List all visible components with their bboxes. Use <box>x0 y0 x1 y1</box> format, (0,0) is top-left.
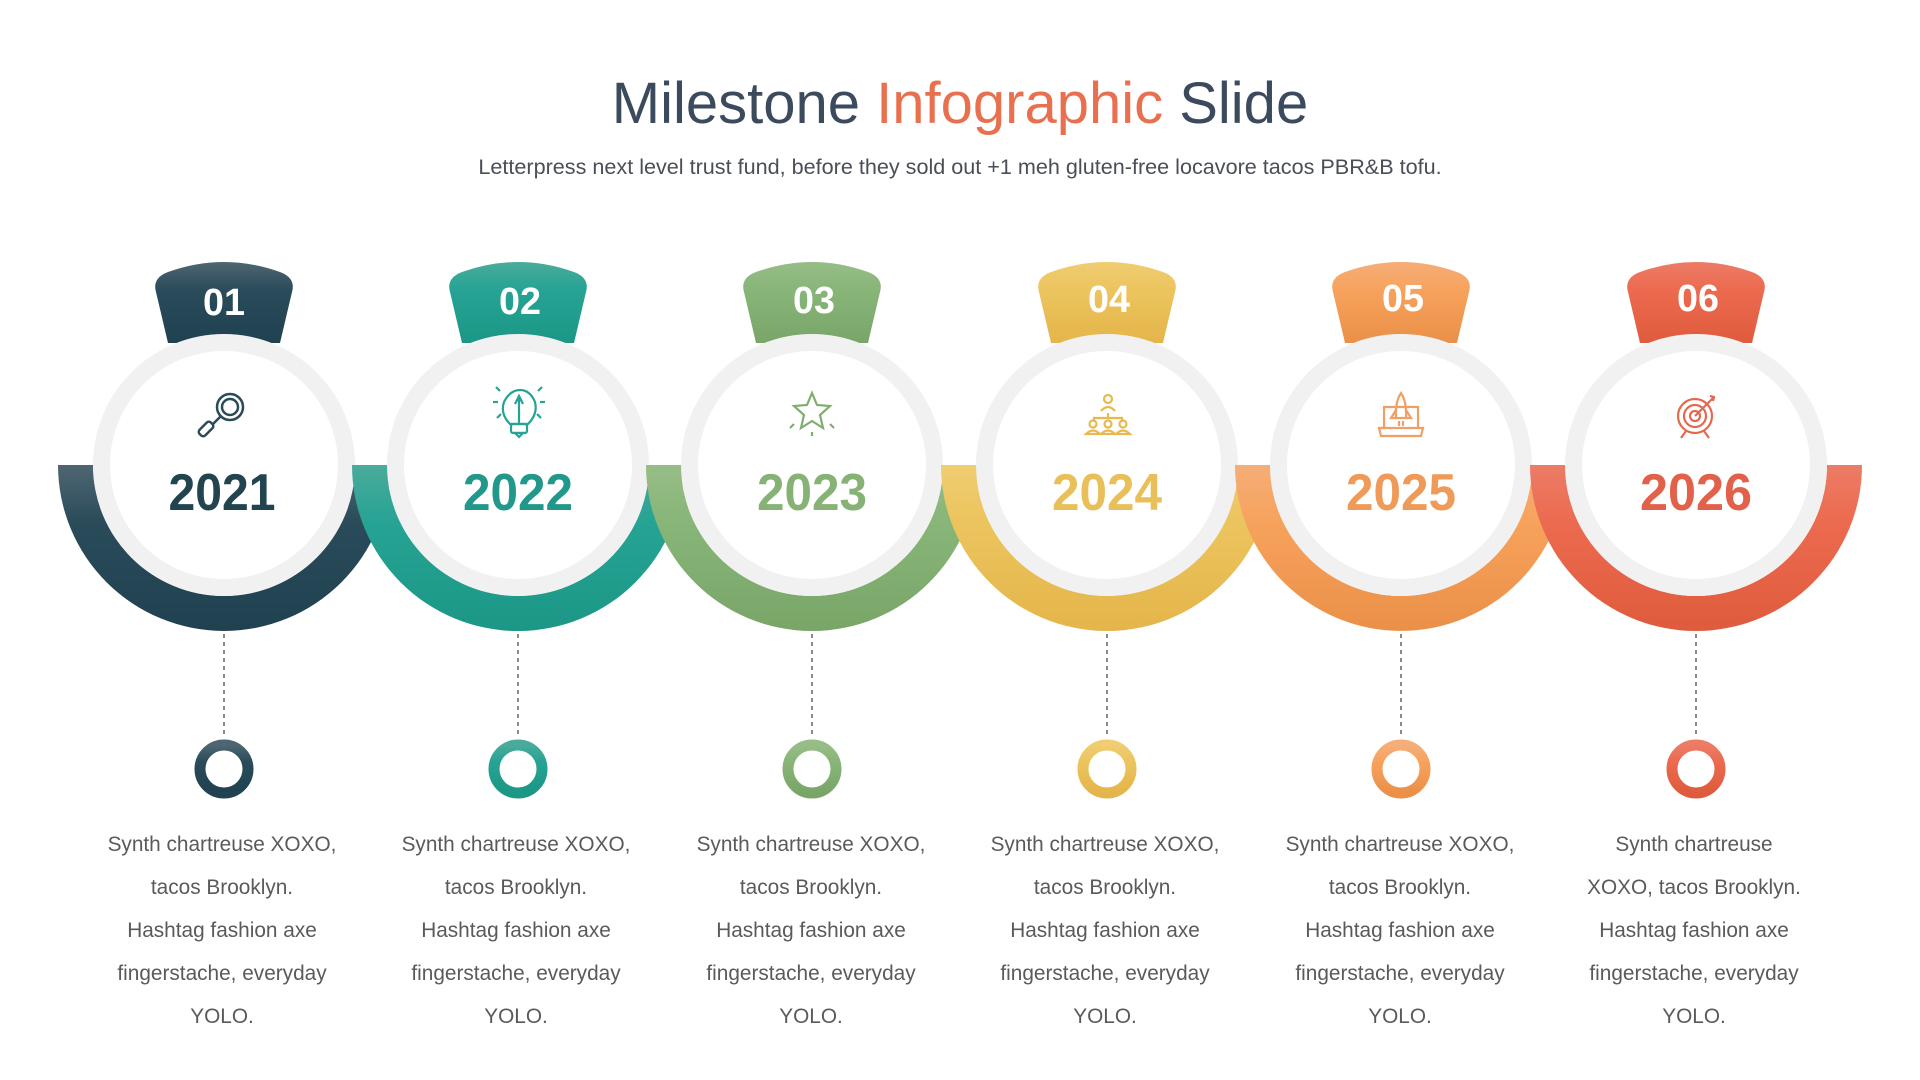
text 3: tacos Brooklyn. <box>740 876 882 899</box>
milestone 4 <box>941 262 1273 631</box>
text 5 <box>1286 833 1514 1028</box>
subtitle: Letterpress next level trust fund, before they sold out +1 meh gluten-free locavore tacos PBR&B tofu. <box>478 154 1442 179</box>
milestone 2 <box>352 262 684 631</box>
tab 04 <box>1038 262 1176 343</box>
icon: bulb <box>493 387 545 437</box>
text 1: Hashtag fashion axe <box>127 919 317 942</box>
milestone 5 <box>1235 262 1567 631</box>
tab 01: 01 <box>203 282 245 324</box>
year 2022: 2022 <box>463 464 573 522</box>
milestone 1 <box>58 262 390 631</box>
tab 05 <box>1332 262 1470 343</box>
year 2026: 2026 <box>1640 464 1752 522</box>
ring 1 <box>58 465 390 631</box>
connectors and dots <box>224 634 1696 735</box>
text 4 <box>991 833 1219 1028</box>
text 1: tacos Brooklyn. <box>151 876 293 899</box>
text 3: Synth chartreuse XOXO, <box>697 833 925 856</box>
text 6: Hashtag fashion axe <box>1599 919 1789 942</box>
tab 04: 04 <box>1088 279 1130 321</box>
ring 6 <box>1530 465 1862 631</box>
icon: laptop rocket <box>1379 393 1423 436</box>
year 2025: 2025 <box>1346 464 1456 522</box>
icon: target <box>1678 396 1714 438</box>
milestone 6 <box>1530 262 1862 631</box>
ring 4 <box>941 465 1273 631</box>
text 5: tacos Brooklyn. <box>1329 876 1471 899</box>
ring 5 <box>1235 465 1567 631</box>
text 4: fingerstache, everyday <box>1000 962 1210 985</box>
text 3: Hashtag fashion axe <box>716 919 906 942</box>
text 2: tacos Brooklyn. <box>445 876 587 899</box>
text 2 <box>402 833 630 1028</box>
text 2: YOLO. <box>484 1005 548 1028</box>
milestone 3 <box>646 262 978 631</box>
ring 2 <box>352 465 684 631</box>
text 1 <box>108 833 336 1028</box>
text 3 <box>697 833 925 1028</box>
text 3: fingerstache, everyday <box>706 962 916 985</box>
text 6: XOXO, tacos Brooklyn. <box>1587 876 1801 899</box>
text 4: Hashtag fashion axe <box>1010 919 1200 942</box>
text 1: Synth chartreuse XOXO, <box>108 833 336 856</box>
tab 06: 06 <box>1677 278 1719 320</box>
text 6: fingerstache, everyday <box>1589 962 1799 985</box>
text 5: Hashtag fashion axe <box>1305 919 1495 942</box>
text 1: YOLO. <box>190 1005 254 1028</box>
tab 02: 02 <box>499 281 541 323</box>
icon: magnifier <box>198 394 243 437</box>
title: Milestone Infographic Slide <box>612 71 1308 136</box>
icon: star <box>790 393 834 436</box>
text 4: YOLO. <box>1073 1005 1137 1028</box>
tab 05: 05 <box>1382 278 1424 320</box>
tab 06 <box>1627 262 1765 343</box>
text 3: YOLO. <box>779 1005 843 1028</box>
tab 03 <box>743 262 881 343</box>
year 2021: 2021 <box>168 464 276 522</box>
tab 03: 03 <box>793 280 835 322</box>
text 6: Synth chartreuse <box>1615 833 1773 856</box>
text 2: fingerstache, everyday <box>411 962 621 985</box>
text 4: tacos Brooklyn. <box>1034 876 1176 899</box>
year 2023: 2023 <box>757 464 867 522</box>
ring 3 <box>646 465 978 631</box>
icon: team <box>1086 395 1130 434</box>
text 6 <box>1587 833 1801 1028</box>
text 1: fingerstache, everyday <box>117 962 327 985</box>
text 5: fingerstache, everyday <box>1295 962 1505 985</box>
tab 02 <box>449 262 587 343</box>
text 5: YOLO. <box>1368 1005 1432 1028</box>
text 2: Synth chartreuse XOXO, <box>402 833 630 856</box>
tab 01 <box>155 262 293 343</box>
text 2: Hashtag fashion axe <box>421 919 611 942</box>
text 5: Synth chartreuse XOXO, <box>1286 833 1514 856</box>
text 4: Synth chartreuse XOXO, <box>991 833 1219 856</box>
year 2024: 2024 <box>1052 464 1162 522</box>
text 6: YOLO. <box>1662 1005 1726 1028</box>
